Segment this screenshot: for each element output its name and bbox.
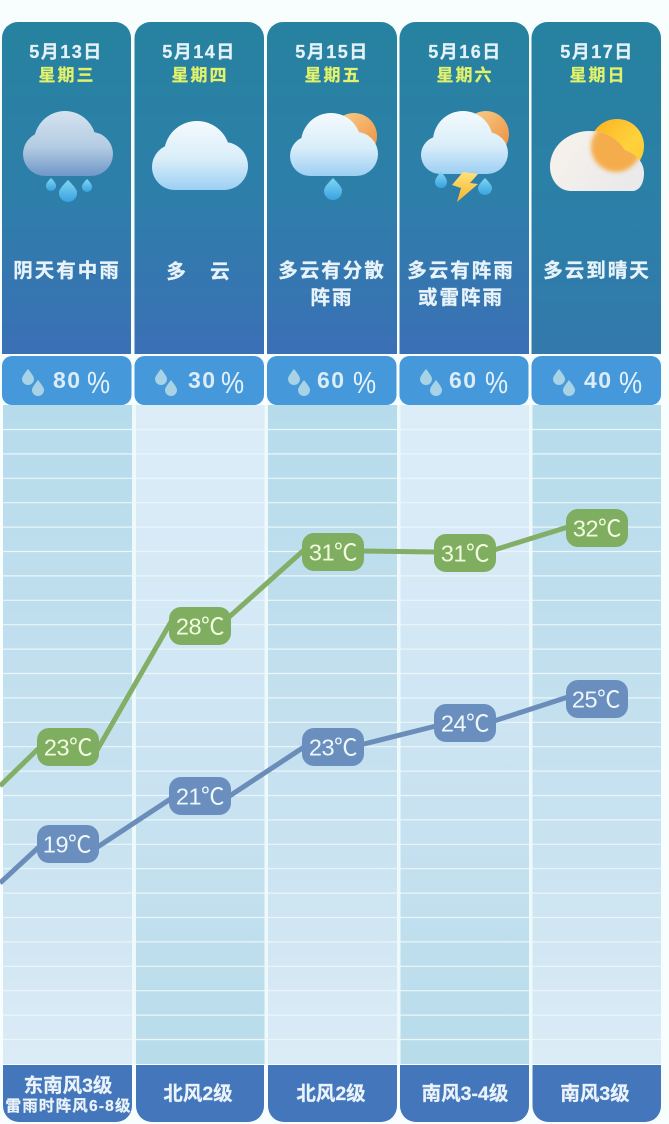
label: high 31℃: 31℃ xyxy=(441,540,489,566)
label: low 24℃ xyxy=(434,704,496,742)
panel: precipitation 60%: 60 xyxy=(317,367,346,393)
panel: weather header 5月17日 xyxy=(532,22,661,354)
icon: rain drops xyxy=(553,369,575,396)
icon: rain drops xyxy=(22,369,44,396)
panel: weather header 5月16日: 5月16日 xyxy=(428,42,502,62)
icon: cloud with thunderstorm xyxy=(421,111,509,202)
panel: wind 南风3-4级 xyxy=(400,1065,529,1122)
panel: precipitation 40%: 40 xyxy=(584,367,613,393)
chart: temperature trend xyxy=(0,405,661,1064)
label: high 32℃: 32℃ xyxy=(573,516,621,542)
label: low 19℃ xyxy=(37,825,99,863)
icon: cloud with sun and rain xyxy=(290,113,378,200)
label: high 31℃ xyxy=(434,534,496,572)
panel: weather header 5月14日: 5月14日 xyxy=(162,42,236,62)
label: low 23℃ xyxy=(302,728,364,766)
panel: wind 北风2级: 北风2级 xyxy=(296,1082,366,1105)
panel: weather header 5月14日: 多 云 xyxy=(166,261,232,283)
panel: wind 北风2级: 北风2级 xyxy=(163,1082,233,1105)
label: low 23℃: 23℃ xyxy=(309,734,357,760)
icon: cloud xyxy=(152,121,248,190)
panel: wind 北风2级 xyxy=(136,1065,264,1122)
icon: rain drops xyxy=(155,369,177,396)
panel: wind 东南风3级: 雷雨时阵风6-8级 xyxy=(6,1096,131,1115)
label: high 31℃ xyxy=(302,533,364,571)
label: high 31℃: 31℃ xyxy=(309,540,357,566)
label: low 21℃: 21℃ xyxy=(176,784,224,810)
label: high 23℃ xyxy=(37,728,99,766)
panel: wind 南风3级 xyxy=(532,1065,661,1122)
panel: precipitation 80% xyxy=(2,356,132,405)
panel: precipitation 80%: 80 xyxy=(53,367,82,393)
label: low 21℃ xyxy=(169,777,231,815)
panel: weather header 5月16日: 多云有阵雨 xyxy=(407,260,515,282)
panel: weather header 5月17日: 5月17日 xyxy=(560,42,634,62)
label: low 25℃ xyxy=(566,680,628,718)
panel: precipitation 40% xyxy=(532,356,661,405)
icon: rain drops xyxy=(420,369,442,396)
panel: wind 东南风3级 xyxy=(3,1065,132,1122)
panel: precipitation 60%: 60 xyxy=(449,367,478,393)
panel: weather header 5月14日 xyxy=(134,22,264,354)
icon: rain drops xyxy=(288,369,310,396)
label: high 23℃: 23℃ xyxy=(44,734,92,760)
panel: weather header 5月16日 xyxy=(400,22,529,354)
panel: weather header 5月13日: 5月13日 xyxy=(29,42,103,62)
panel: weather header 5月16日: 星期六 xyxy=(436,66,494,85)
label: low 19℃: 19℃ xyxy=(43,832,91,858)
icon: sun behind cloud xyxy=(550,119,644,191)
panel: weather header 5月13日: 阴天有中雨 xyxy=(13,260,121,282)
label: high 28℃: 28℃ xyxy=(176,614,224,640)
label: low 25℃: 25℃ xyxy=(572,686,620,712)
panel: wind 南风3-4级: 南风3-4级 xyxy=(422,1082,509,1105)
panel: weather header 5月14日: 星期四 xyxy=(172,66,228,85)
panel: weather header 5月17日: 星期日 xyxy=(570,66,626,85)
panel: precipitation 80%: % xyxy=(87,365,110,399)
panel: precipitation 60%: % xyxy=(353,365,376,399)
panel: precipitation 30%: % xyxy=(221,365,244,399)
panel: weather header 5月15日: 5月15日 xyxy=(295,42,369,62)
panel: wind 东南风3级: 东南风3级 xyxy=(24,1074,113,1097)
panel: weather header 5月13日 xyxy=(2,22,131,354)
panel: wind 北风2级 xyxy=(268,1065,397,1122)
panel: weather header 5月13日: 星期三 xyxy=(38,66,96,85)
panel: precipitation 30% xyxy=(134,356,264,405)
panel: precipitation 60% xyxy=(400,356,528,405)
panel: weather header 5月17日: 多云到晴天 xyxy=(543,260,651,282)
label: low 24℃: 24℃ xyxy=(441,710,489,736)
panel: weather header 5月15日 xyxy=(267,22,397,354)
line: daily low temperature xyxy=(0,697,568,883)
panel: weather header 5月15日: 阵雨 xyxy=(310,287,354,309)
label: high 32℃ xyxy=(566,509,628,547)
panel: weather header 5月15日: 多云有分散 xyxy=(278,260,386,282)
panel: wind 南风3级: 南风3级 xyxy=(560,1082,630,1105)
label: high 28℃ xyxy=(169,607,231,645)
panel: weather header 5月15日: 星期五 xyxy=(304,66,362,85)
line: daily high temperature xyxy=(0,527,568,786)
panel: precipitation 60% xyxy=(267,356,396,405)
panel: precipitation 60%: % xyxy=(485,365,508,399)
icon: cloud with rain xyxy=(23,111,113,202)
panel: precipitation 30%: 30 xyxy=(188,367,217,393)
panel: weather header 5月16日: 或雷阵雨 xyxy=(418,286,504,309)
panel: precipitation 40%: % xyxy=(619,365,642,399)
